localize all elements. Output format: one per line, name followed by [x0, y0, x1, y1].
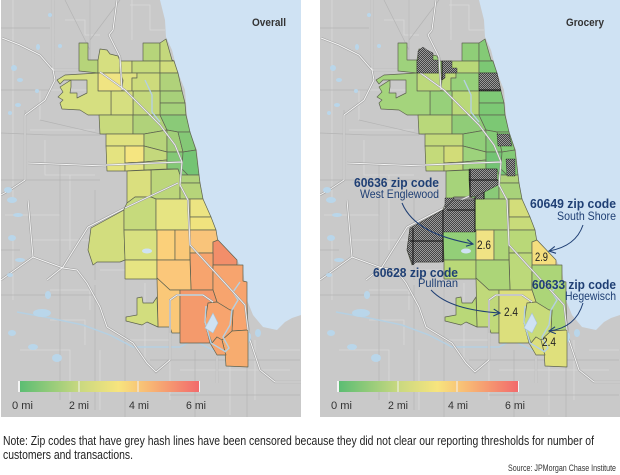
censored zip codes: hatched — [407, 47, 515, 265]
legend: grocery colour scale: 0 mi — [331, 400, 352, 412]
legend: overall colour scale: 0 mi — [12, 400, 33, 412]
legend: grocery colour scale: 2 mi — [388, 400, 408, 412]
legend: overall colour scale: 4 mi — [129, 400, 149, 412]
map title: Overall: Overall — [252, 17, 286, 29]
note text — [3, 434, 594, 462]
callout: 60633 Hegewisch: 2.4 — [542, 337, 557, 349]
callout: 60636 West Englewood — [354, 175, 491, 252]
panel: grocery map — [320, 0, 620, 417]
legend: overall colour scale: 6 mi — [186, 400, 206, 412]
legend: overall colour scale: 2 mi — [69, 400, 89, 412]
legend: grocery colour scale: 6 mi — [505, 400, 525, 412]
zip code choropleth: overall — [57, 39, 248, 367]
panel: overall map — [1, 0, 301, 417]
callout: 60649 South Shore: 2.9 — [535, 252, 548, 264]
callout: 60628 Pullman: 60628 zip code — [373, 265, 458, 280]
legend: overall colour scale — [12, 381, 206, 412]
callout: 60649 South Shore: 60649 zip code — [530, 196, 616, 211]
legend: grocery colour scale: 4 mi — [448, 400, 468, 412]
callout: 60649 South Shore — [530, 196, 616, 264]
note text: customers and transactions. — [3, 448, 133, 462]
callout: 60628 Pullman: 2.4 — [504, 307, 519, 319]
callout: 60628 Pullman: Pullman — [418, 276, 458, 290]
map title: Grocery: Grocery — [566, 17, 605, 29]
callout: 60636 West Englewood: 60636 zip code — [354, 175, 439, 190]
callout: 60636 West Englewood: 2.6 — [477, 240, 491, 252]
callout: 60633 Hegewisch — [532, 277, 616, 349]
zip code choropleth: grocery — [376, 39, 567, 367]
callout: 60628 Pullman — [373, 265, 519, 319]
legend: grocery colour scale — [331, 381, 525, 412]
callout: 60636 West Englewood: West Englewood — [360, 187, 439, 201]
